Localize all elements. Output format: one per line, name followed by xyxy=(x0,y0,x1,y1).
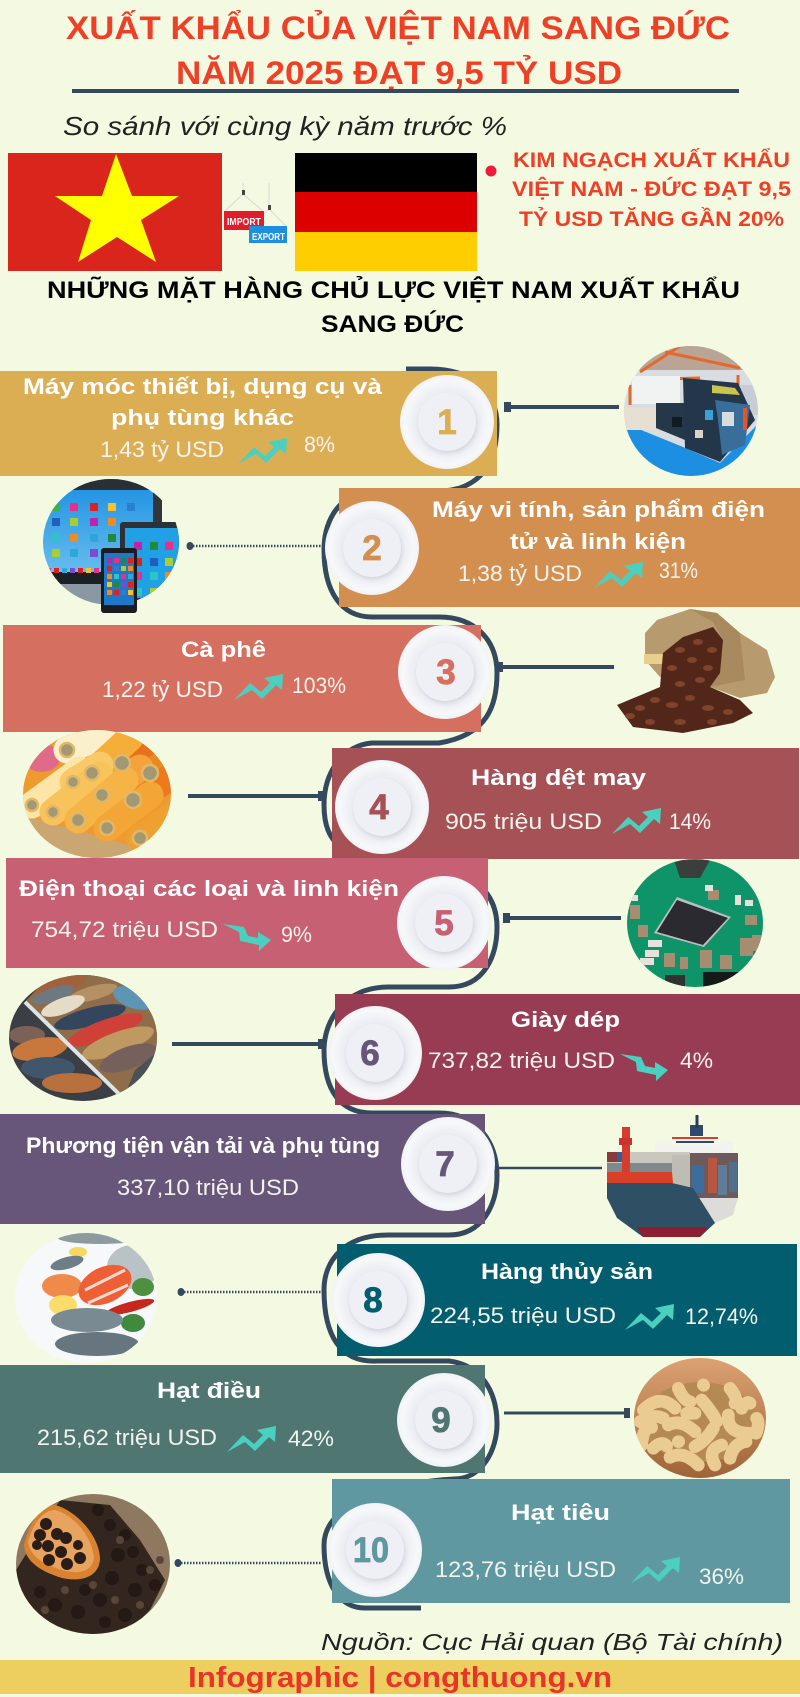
icon: arrow up xyxy=(631,1557,680,1583)
number badge 6: 6 xyxy=(360,1034,380,1073)
icon: import export signs xyxy=(224,183,287,243)
connector line xyxy=(172,1042,324,1046)
image: circuit board xyxy=(626,858,764,990)
panel: item 9 cashew: 215,62 triệu USD xyxy=(37,1425,217,1450)
number badge 4 xyxy=(335,760,429,854)
panel: item 8 seafood: Hàng thủy sản xyxy=(481,1259,653,1284)
number badge 8: 8 xyxy=(363,1281,383,1320)
serpentine connector xyxy=(324,369,497,1608)
number badge 4: 4 xyxy=(369,788,389,827)
panel: item 4 textiles: Hàng dệt may xyxy=(471,765,647,790)
callout: headline figure: VIỆT NAM - ĐỨC ĐẠT 9,5 xyxy=(512,177,791,201)
number badge 7: 7 xyxy=(435,1145,455,1184)
icon: arrow down xyxy=(620,1054,668,1081)
panel: item 1 machinery: Máy móc thiết bị, dụng cụ và xyxy=(23,374,383,399)
panel: item 10 pepper: 123,76 triệu USD xyxy=(435,1557,616,1582)
image: computers and phones xyxy=(42,479,182,613)
panel: item 2 computers: 31% xyxy=(659,558,698,583)
connector line xyxy=(506,405,619,409)
icon: arrow up xyxy=(612,808,661,834)
panel: item 10 pepper xyxy=(174,1479,790,1603)
dotted connector xyxy=(181,1291,322,1293)
icon: import export signs: EXPORT xyxy=(252,232,285,243)
callout: headline figure: KIM NGẠCH XUẤT KHẨU xyxy=(513,149,790,172)
panel: item 9 cashew xyxy=(0,1365,630,1473)
number badge 1: 1 xyxy=(437,403,457,442)
source note: Nguồn: Cục Hải quan (Bộ Tài chính) xyxy=(321,1629,783,1655)
number badge 5 xyxy=(397,876,491,970)
number badge 7 xyxy=(401,1117,495,1211)
panel: item 6 footwear: 737,82 triệu USD xyxy=(428,1048,615,1073)
number badge 10 xyxy=(328,1503,422,1597)
dotted connector xyxy=(190,545,324,547)
subtitle: comparison note: So sánh với cùng kỳ năm trước % xyxy=(63,111,507,141)
panel: item 4 textiles: 14% xyxy=(669,809,711,834)
panel: item 2 computers: tử và linh kiện xyxy=(510,529,686,554)
panel: item 8 seafood xyxy=(178,1244,797,1356)
image: container ship xyxy=(607,1115,738,1237)
connector line xyxy=(505,916,621,920)
panel: item 7 vehicles xyxy=(0,1114,602,1224)
heading: main export goods xyxy=(47,275,740,338)
panel: item 5 phones xyxy=(6,858,621,970)
footer band: Infographic | congthuong.vn xyxy=(188,1662,612,1694)
image: seafood platter xyxy=(14,1232,160,1364)
panel: item 5 phones: Điện thoại các loại và linh kiện xyxy=(19,876,399,901)
number badge 9: 9 xyxy=(431,1401,451,1440)
image: cashews xyxy=(632,1357,768,1479)
panel: item 8 seafood: 224,55 triệu USD xyxy=(430,1303,616,1328)
panel: item 7 vehicles: 337,10 triệu USD xyxy=(117,1175,299,1200)
number badge 5: 5 xyxy=(434,904,454,943)
panel: item 10 pepper: 36% xyxy=(699,1564,744,1589)
panel: item 1 machinery: phụ tùng khác xyxy=(111,405,294,430)
panel: item 3 coffee: 1,22 tỷ USD xyxy=(102,677,223,702)
heading: main export goods: NHỮNG MẶT HÀNG CHỦ LỰC VIỆT NAM XUẤT KHẨU xyxy=(47,275,740,304)
panel: item 2 computers: 1,38 tỷ USD xyxy=(458,561,582,586)
panel: item 8 seafood: 12,74% xyxy=(685,1304,758,1329)
number badge 3: 3 xyxy=(436,653,456,692)
icon: arrow up xyxy=(234,674,283,700)
icon: arrow up xyxy=(238,438,287,464)
title: XUẤT KHẨU CỦA VIỆT NAM SANG ĐỨC xyxy=(66,10,730,46)
panel: item 2 computers: Máy vi tính, sản phẩm điện xyxy=(432,497,765,522)
panel: item 1 machinery: 8% xyxy=(304,432,335,457)
panel: item 4 textiles xyxy=(188,748,799,859)
number badge 2 xyxy=(325,501,419,595)
image: factory machine xyxy=(624,346,758,480)
footer band xyxy=(0,1660,800,1694)
number badge 1 xyxy=(400,375,494,469)
panel: item 9 cashew: 42% xyxy=(288,1426,334,1451)
number badge 2: 2 xyxy=(362,529,382,568)
connector line xyxy=(188,794,324,798)
icon: import export signs: IMPORT xyxy=(227,217,261,228)
image: shoes xyxy=(8,969,160,1103)
image: pepper spoon xyxy=(14,1493,172,1640)
dotted connector xyxy=(178,1562,322,1564)
connector line xyxy=(504,1412,628,1414)
panel: item 1 machinery xyxy=(0,371,619,476)
number badge 10: 10 xyxy=(353,1531,389,1570)
icon: arrow up xyxy=(594,562,643,588)
panel: item 1 machinery: 1,43 tỷ USD xyxy=(100,437,224,462)
connector line xyxy=(499,1167,602,1169)
panel: item 4 textiles: 905 triệu USD xyxy=(445,809,602,834)
flag: Vietnam xyxy=(8,153,222,271)
callout: headline figure xyxy=(486,149,791,231)
number badge 8 xyxy=(331,1253,425,1347)
connector line xyxy=(499,665,614,669)
number badge 9 xyxy=(397,1373,491,1467)
heading: main export goods: SANG ĐỨC xyxy=(321,310,464,338)
panel: item 3 coffee: 103% xyxy=(292,673,346,698)
number badge 3 xyxy=(398,625,492,719)
title xyxy=(66,10,730,91)
icon: arrow down xyxy=(223,924,271,951)
icon: arrow up xyxy=(227,1426,276,1452)
panel: item 3 coffee: Cà phê xyxy=(181,637,266,662)
title: NĂM 2025 ĐẠT 9,5 TỶ USD xyxy=(176,55,622,91)
flag: Germany xyxy=(295,153,477,271)
panel: item 2 computers xyxy=(186,488,800,607)
image: fabric rolls xyxy=(23,730,171,858)
number badge 6 xyxy=(328,1006,422,1100)
image: coffee sack xyxy=(617,609,775,733)
panel: item 5 phones: 754,72 triệu USD xyxy=(31,917,218,942)
panel: item 6 footwear xyxy=(172,994,800,1105)
icon: arrow up xyxy=(625,1304,674,1330)
panel: item 3 coffee xyxy=(3,625,614,732)
panel: item 10 pepper: Hạt tiêu xyxy=(511,1500,610,1525)
panel: item 7 vehicles: Phương tiện vận tải và phụ tùng xyxy=(26,1133,380,1158)
panel: item 5 phones: 9% xyxy=(281,922,312,947)
callout: headline figure: TỶ USD TĂNG GẦN 20% xyxy=(519,208,784,231)
panel: item 9 cashew: Hạt điều xyxy=(157,1378,261,1403)
panel: item 6 footwear: Giày dép xyxy=(511,1007,620,1032)
panel: item 6 footwear: 4% xyxy=(680,1048,713,1073)
